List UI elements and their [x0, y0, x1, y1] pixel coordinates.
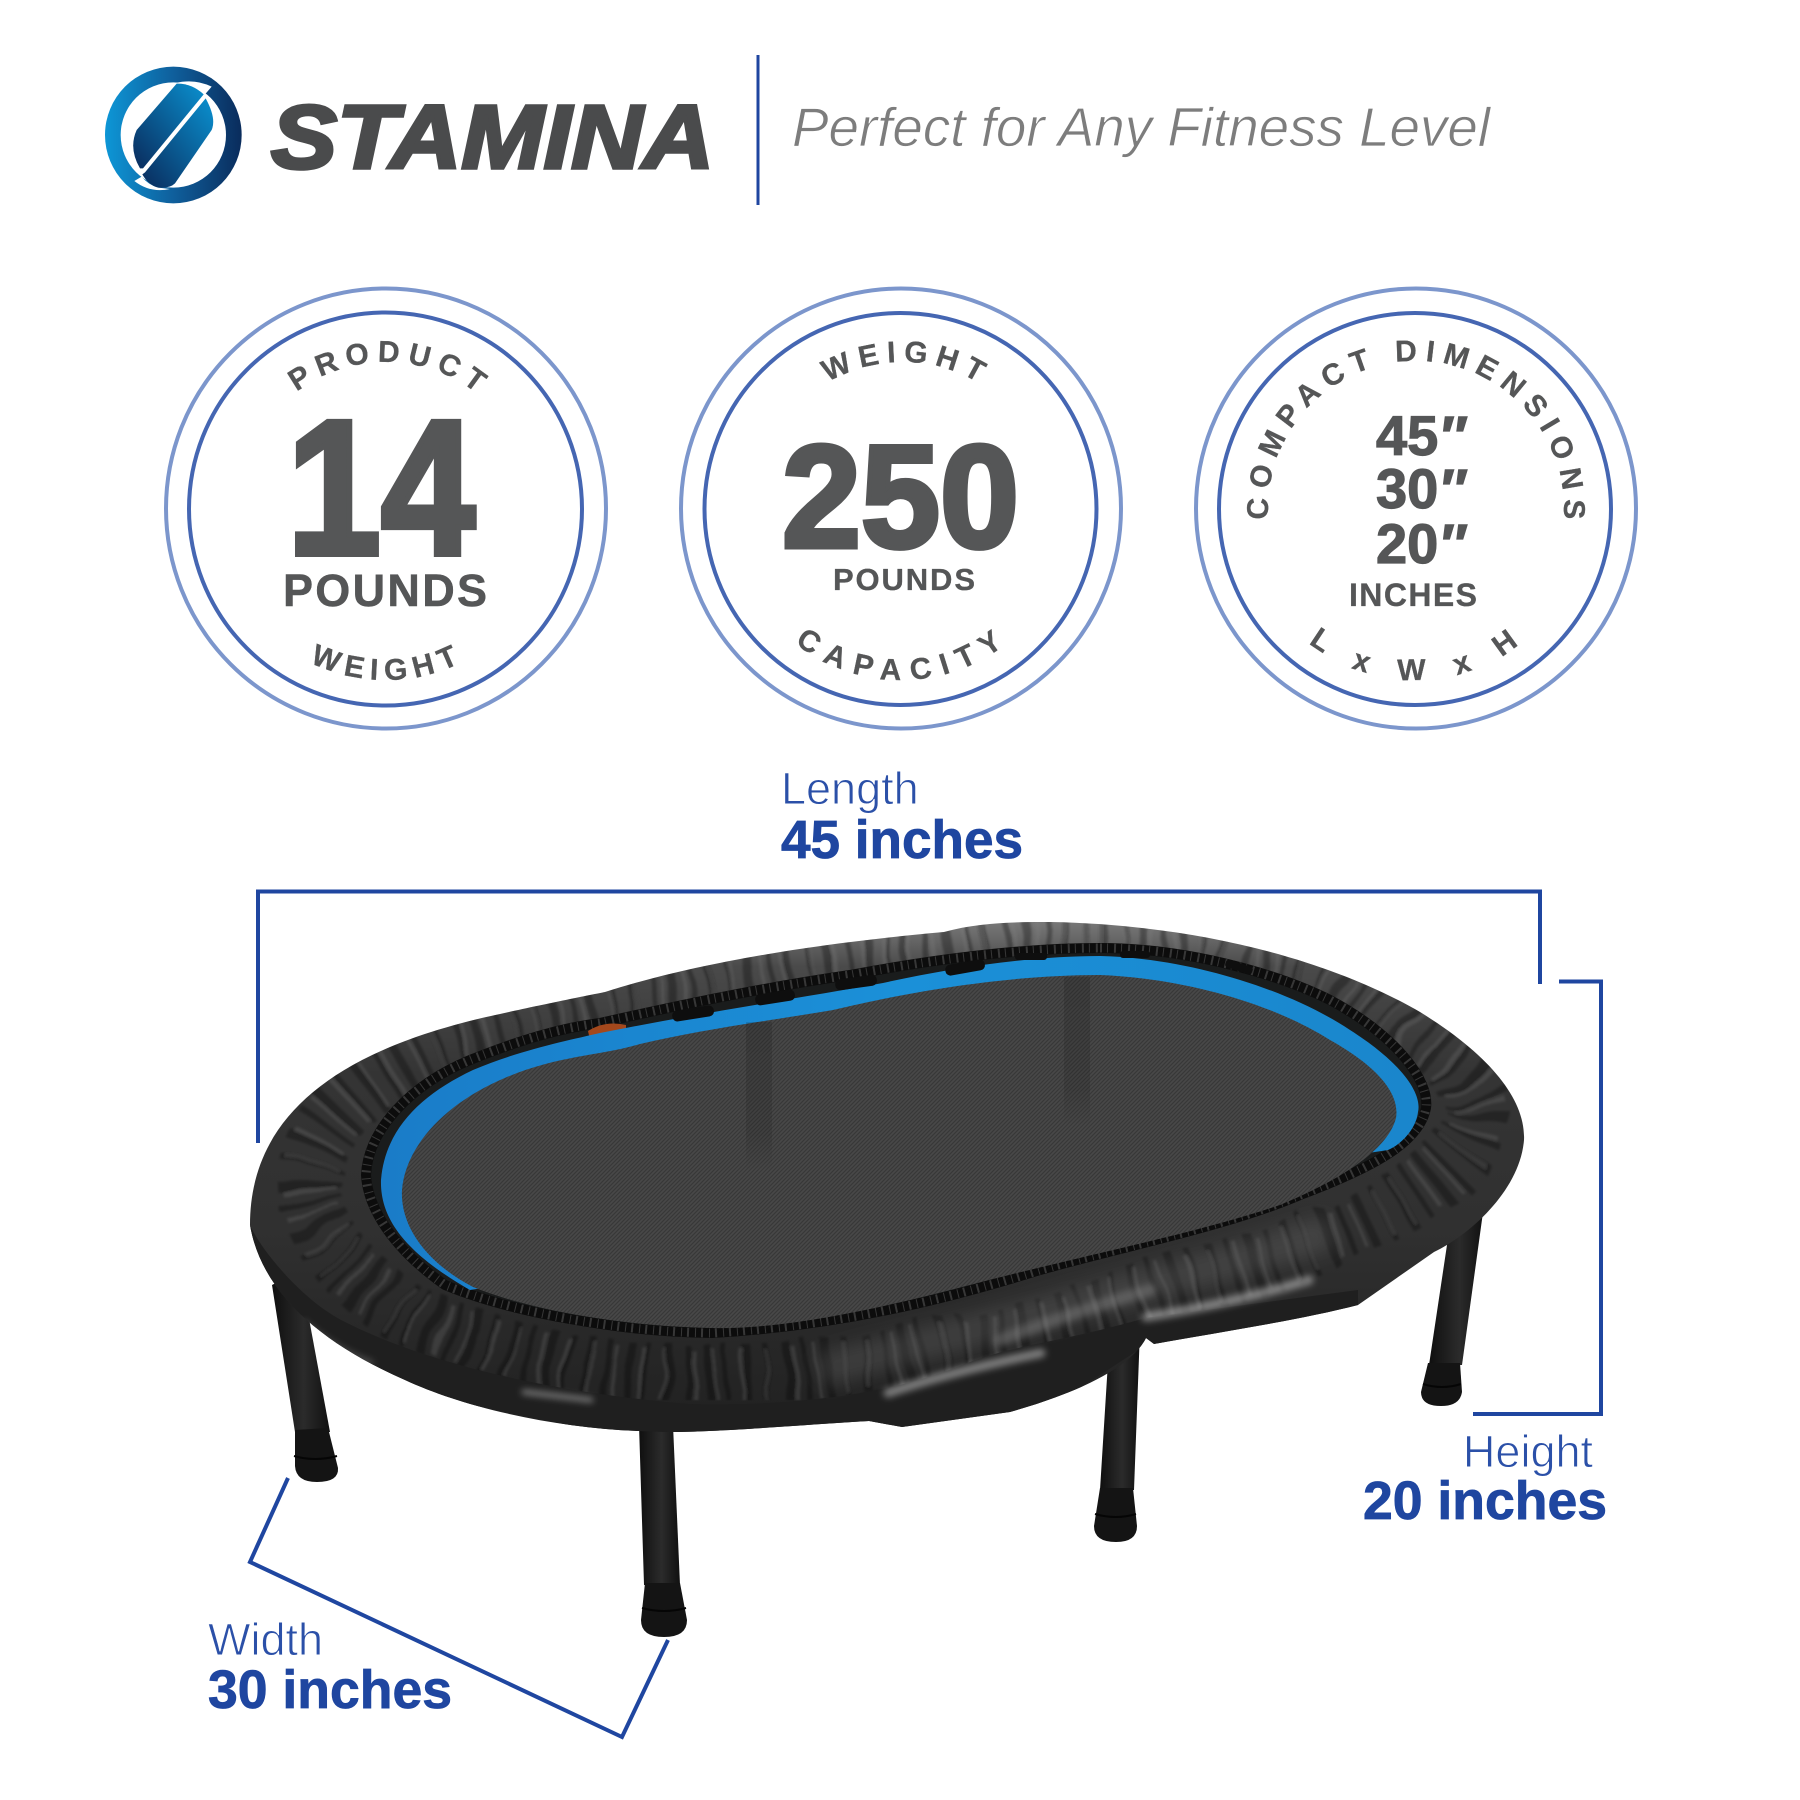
value: 30 inches: 30 inches: [208, 1660, 452, 1720]
value: width: 30″: [1376, 457, 1467, 520]
spring gap: [366, 948, 1426, 1333]
unit: inches: INCHES: [1349, 577, 1477, 613]
leg: back right: [1421, 1205, 1484, 1406]
panel: compact dimensions badge: [1194, 286, 1638, 730]
cover highlights: [304, 1280, 1309, 1400]
unit: pounds: POUNDS: [833, 562, 975, 597]
unit: pounds: POUNDS: [283, 565, 487, 616]
value: 250: 250: [782, 415, 1019, 578]
label: width: Width: [208, 1614, 323, 1665]
blue spring pad: [381, 956, 1419, 1290]
value: 14: 14: [287, 380, 475, 595]
orange frame patch: [588, 1023, 626, 1040]
value: 20 inches: 20 inches: [1363, 1471, 1607, 1531]
panel: weight capacity badge: [679, 286, 1123, 730]
jumping mat: [402, 975, 1396, 1328]
arc label: weight: WEIGHT: [818, 341, 988, 380]
cover sheen: [820, 1232, 1330, 1370]
leg shadows on mat: [746, 977, 1090, 1172]
bracket: width: [250, 1478, 668, 1737]
height dimension: [1363, 982, 1607, 1531]
arc label: compact dimensions: COMPACT DIMENSIONS: [1246, 340, 1586, 518]
arc label: product: PRODUCT: [287, 340, 489, 391]
arc label: L x W x H: L x W x H: [1310, 627, 1518, 680]
spring slots: [671, 951, 1254, 1022]
bracket: length: [258, 892, 1540, 1143]
trampoline photo illustration: [250, 922, 1524, 1637]
cover side band: [250, 1225, 1358, 1440]
width dimension: [208, 1478, 668, 1737]
logo wordmark: STAMINA: [271, 88, 714, 188]
value: 45 inches: 45 inches: [781, 810, 1023, 870]
icon: Stamina logo: [105, 67, 242, 203]
leg: front centre: [639, 1425, 687, 1637]
length dimension: [258, 763, 1540, 1143]
header: [105, 55, 1492, 205]
leg: back centre: [1094, 1330, 1140, 1542]
vinyl cover: [250, 922, 1524, 1440]
elastic gathers: [366, 948, 1426, 1333]
arc label: weight: WEIGHT: [314, 644, 454, 680]
value: height: 20″: [1376, 512, 1467, 575]
panel: product weight badge: [164, 286, 608, 730]
divider: [756, 55, 760, 205]
trampoline legs: [272, 1205, 1484, 1637]
leg: front left: [272, 1270, 338, 1482]
label: height: Height: [1463, 1426, 1593, 1477]
bracket: height: [1473, 982, 1601, 1414]
label: length: Length: [781, 763, 919, 814]
value: length: 45″: [1376, 404, 1467, 467]
tagline: Perfect for Any Fitness Level: [792, 96, 1492, 158]
arc label: capacity: CAPACITY: [798, 629, 998, 680]
